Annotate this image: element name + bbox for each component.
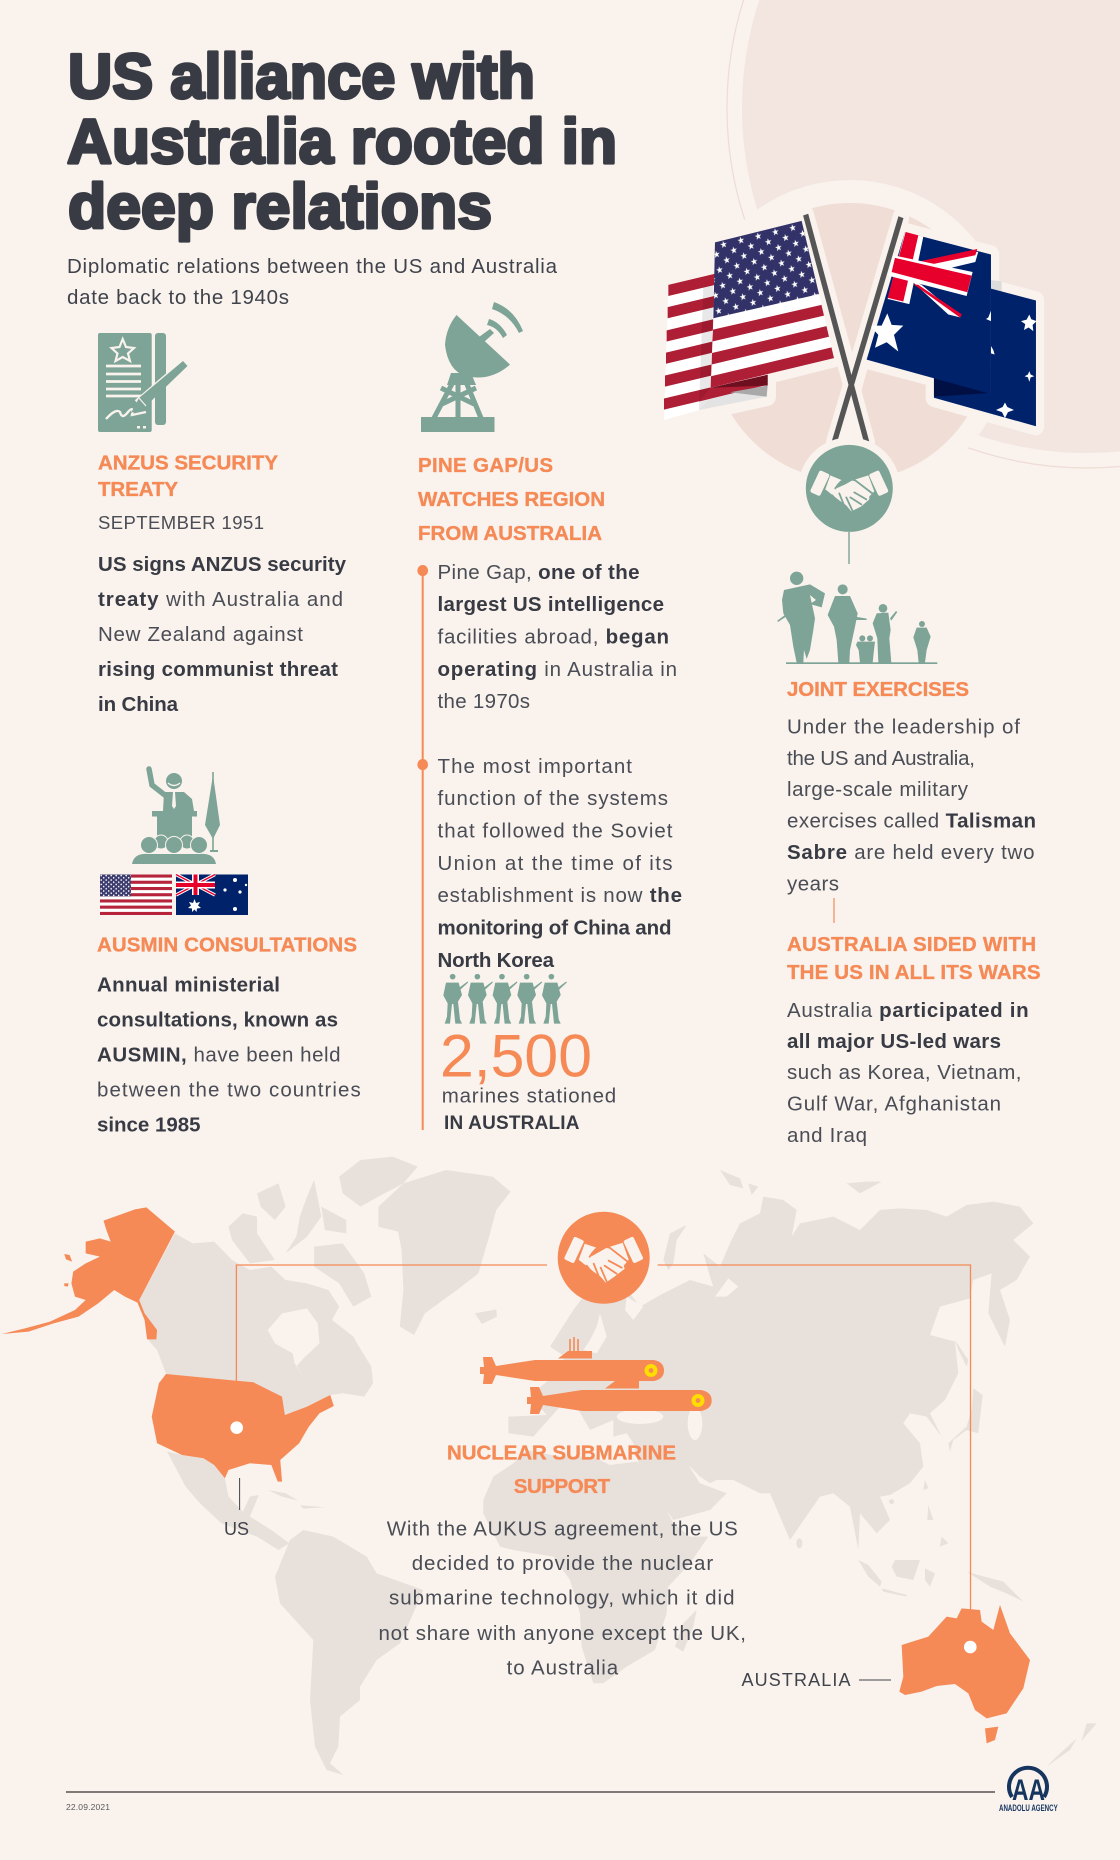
text block: monitoring: North Korea [438,949,555,972]
logo: Anadolu Agency [999,1768,1058,1813]
heading: SUPPORT [514,1475,611,1498]
world map [139,1157,1097,1775]
subtitle [67,255,558,309]
text block: Pine Gap facts: operating in Australia in [438,658,677,681]
title: deep relations [68,172,492,242]
text block: monitoring: The most important [438,755,632,778]
body text: treaty with Australia and [98,588,343,611]
icon: five marines [443,974,567,1024]
panel: AUSMIN consultations [97,769,361,1136]
body text: the US and Australia, [787,747,975,770]
Australian flag [867,232,1037,426]
body text: US signs ANZUS security [98,553,347,576]
body text: consultations, known as [97,1008,338,1032]
heading: joint exercises: JOINT EXERCISES [787,678,969,701]
flag halos [664,215,1036,442]
logo: Anadolu Agency: ANADOLU AGENCY [999,1803,1058,1813]
heading: NUCLEAR SUBMARINE [447,1442,676,1464]
submarine two [527,1366,712,1414]
text block: monitoring: that followed the Soviet [438,820,673,842]
heading: ANZUS: ANZUS SECURITY [98,452,278,474]
body text: New Zealand against [98,623,303,646]
text block: Pine Gap facts: Pine Gap, one of the [438,561,640,584]
heading: Pine Gap: PINE GAP/US [418,454,553,477]
heading: ANZUS [98,452,278,501]
label: US [224,1478,249,1539]
body text: Annual ministerial [97,974,280,996]
body text: Australia participated in [787,999,1029,1022]
submarine one [480,1337,664,1384]
body text: to Australia [507,1656,619,1680]
heading [787,933,1040,984]
body text: Gulf War, Afghanistan [787,1092,1001,1116]
body text [97,974,361,1136]
title: US alliance with [68,42,535,112]
body text: submarine technology, which it did [389,1586,734,1610]
icon: speaker at podium [132,769,220,864]
heading: Pine Gap: FROM AUSTRALIA [418,522,602,545]
icon: mini Australian flag [176,874,248,915]
map: Australia [899,1605,1030,1743]
body text: since 1985 [97,1114,200,1136]
text block: monitoring: establishment is now the [438,884,682,907]
teal connector line [848,532,850,564]
timeline [417,565,428,1130]
title: Australia rooted in [67,107,617,177]
text block: monitoring: Union at the time of its [438,852,672,875]
label: Australia: AUSTRALIA [742,1670,850,1690]
text block: Pine Gap facts [438,561,677,713]
stat: 2,500 marines [440,1022,616,1134]
North America and Greenland [139,1157,511,1550]
panel: joint exercises [777,572,1036,896]
flag poles [806,215,901,442]
stat: 2,500 marines: IN AUSTRALIA [444,1113,580,1134]
icon: satellite dish [421,302,523,432]
panel: nuclear submarine support [378,1442,746,1680]
text block: monitoring: monitoring of China and [438,916,672,940]
panel: Australia sided with US [787,933,1040,1147]
subtitle: date back to the 1940s [67,286,289,309]
body text: With the AUKUS agreement, the US [387,1518,738,1540]
icon: mini US flag [100,874,172,915]
text block: monitoring: function of the systems [438,787,668,810]
heading [447,1442,676,1498]
body text: Under the leadership of [787,716,1020,738]
body text [787,999,1029,1147]
South America and Africa [275,1450,708,1775]
teal handshake emblem [798,437,900,539]
icon: soldiers silhouettes [777,572,937,664]
text block: Pine Gap facts: largest US intelligence [438,593,664,616]
icon: nuclear submarines [480,1337,712,1414]
text block: Pine Gap facts: the 1970s [438,690,530,713]
connector lines [236,1265,970,1610]
crossed flags [664,215,1037,442]
body text: in China [98,693,179,716]
label: US: US [224,1519,249,1539]
body text: all major US-led wars [787,1030,1001,1053]
heading: ANZUS: TREATY [98,478,178,501]
US flag [664,221,834,420]
heading: Pine Gap [418,454,605,545]
connector [833,898,835,923]
panel: ANZUS security treaty [98,333,347,716]
text block: monitoring [438,755,682,972]
map: Alaska [2,1207,175,1339]
body text: and Iraq [787,1124,867,1147]
map: contiguous US [152,1374,334,1482]
body text: AUSMIN, have been held [97,1044,340,1066]
body text: years [787,872,839,896]
body text: exercises called Talisman [787,810,1036,832]
body text: rising communist threat [98,658,338,681]
panel: Pine Gap [417,302,682,1134]
heading: THE US IN ALL ITS WARS [787,961,1040,984]
Indonesia, New Guinea and New Zealand [858,1560,1097,1767]
body text: such as Korea, Vietnam, [787,1061,1022,1084]
date: SEPTEMBER 1951 [98,512,264,533]
date: 22.09.2021 [66,1802,110,1812]
body text [98,553,347,716]
Eurasia and islands [508,1170,1033,1550]
body text: large-scale military [787,778,969,801]
heading: AUSMIN: AUSMIN CONSULTATIONS [97,934,357,956]
stat: 2,500 marines: 2,500 [440,1022,592,1090]
logo: Anadolu Agency: AA [1012,1774,1045,1807]
text block: Pine Gap facts: facilities abroad, began [438,626,669,648]
body text: decided to provide the nuclear [412,1552,713,1575]
stat: 2,500 marines: marines stationed [442,1085,616,1108]
footer rule [66,1791,995,1793]
orange handshake emblem [558,1212,650,1304]
body text [378,1518,746,1680]
heading: Pine Gap: WATCHES REGION [418,488,605,511]
subtitle: Diplomatic relations between the US and Australia [67,255,558,278]
icon: signed document [98,333,188,432]
body text: not share with anyone except the UK, [378,1622,746,1645]
body text: between the two countries [97,1078,361,1102]
body text [787,716,1036,896]
decorative background circles [690,0,1120,500]
title [67,42,617,242]
body text: Sabre are held every two [787,841,1034,864]
heading: AUSTRALIA SIDED WITH [787,933,1036,956]
